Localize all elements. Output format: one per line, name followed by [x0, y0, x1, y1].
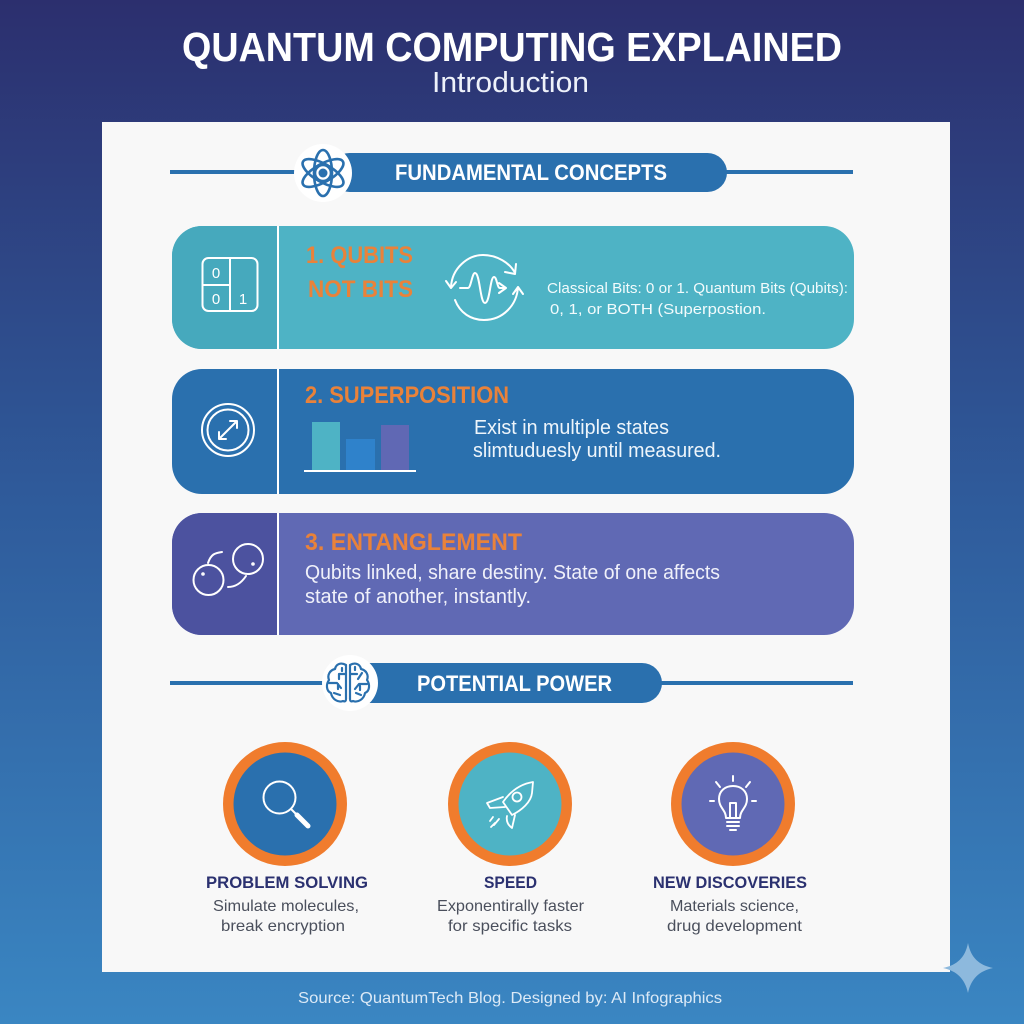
icon: entangled qubits [194, 544, 263, 595]
panel: entanglement [172, 513, 854, 635]
description [437, 898, 585, 935]
description [547, 280, 848, 318]
description [305, 562, 720, 608]
item: problem solving [206, 742, 368, 935]
icon: light bulb [710, 776, 756, 830]
description [473, 417, 721, 462]
section header: potential power [170, 655, 853, 711]
icon: binary grid: 0 [212, 265, 220, 282]
description: break encryption [221, 918, 345, 935]
description: Simulate molecules, [213, 898, 359, 915]
icon: sparkle [943, 943, 993, 993]
icon: rocket [487, 782, 533, 828]
description: Exist in multiple states [474, 417, 669, 439]
icon: concentric circles with arrow [202, 404, 254, 456]
icon: magnifier [264, 782, 308, 826]
item: speed [437, 742, 585, 935]
description: 0, 1, or BOTH (Superpostion. [550, 301, 766, 318]
section header: fundamental concepts [170, 144, 853, 202]
heading: 1. QUBITS [306, 242, 413, 269]
icon: wave with cycle arrows [446, 255, 523, 320]
description: state of another, instantly. [305, 586, 531, 608]
icon: binary grid: 0 [212, 291, 220, 308]
heading: 3. ENTANGLEMENT [305, 529, 522, 556]
subtitle: Introduction [432, 67, 589, 99]
heading: 2. SUPERPOSITION [305, 382, 509, 409]
label: NEW DISCOVERIES [653, 873, 807, 892]
description: Materials science, [670, 898, 799, 915]
icon: brain [322, 655, 378, 711]
icon: binary grid: 1 [239, 291, 247, 308]
label: PROBLEM SOLVING [206, 873, 368, 892]
description: Qubits linked, share destiny. State of one affects [305, 562, 720, 584]
panel: superposition [172, 369, 854, 494]
label: SPEED [484, 873, 537, 892]
description: for specific tasks [448, 918, 572, 935]
bar chart [304, 422, 416, 472]
title: QUANTUM COMPUTING EXPLAINED [182, 24, 842, 70]
section heading: POTENTIAL POWER [417, 671, 612, 696]
main panel [102, 122, 950, 972]
heading: NOT BITS [308, 276, 413, 303]
description: drug development [667, 918, 803, 935]
icon: atom [294, 144, 352, 202]
item: new discoveries [653, 742, 807, 935]
heading [306, 242, 413, 303]
description: Exponentirally faster [437, 898, 585, 915]
panel: qubits not bits [172, 226, 854, 349]
description [667, 898, 803, 935]
description [213, 898, 359, 935]
description: Classical Bits: 0 or 1. Quantum Bits (Qubits): [547, 280, 848, 297]
description: slimtuduesly until measured. [473, 440, 721, 462]
footer source line: Source: QuantumTech Blog. Designed by: AI Infographics [298, 990, 722, 1007]
icon: binary grid [202, 258, 258, 311]
section heading: FUNDAMENTAL CONCEPTS [395, 160, 667, 185]
